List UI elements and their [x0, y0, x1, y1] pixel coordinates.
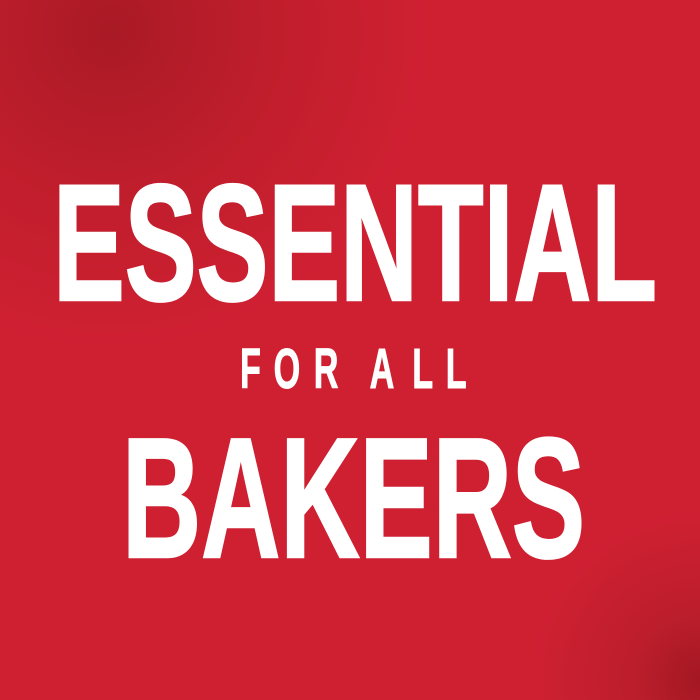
subtitle: FOR ALL: L	[446, 336, 467, 400]
subtitle: FOR ALL: F	[240, 336, 261, 400]
subtitle: FOR ALL: L	[412, 336, 433, 400]
subtitle: FOR ALL: O	[274, 336, 300, 400]
subtitle: FOR ALL: R	[314, 336, 339, 400]
subtitle: FOR ALL: A	[370, 336, 394, 400]
subtitle: FOR ALL	[240, 336, 467, 400]
